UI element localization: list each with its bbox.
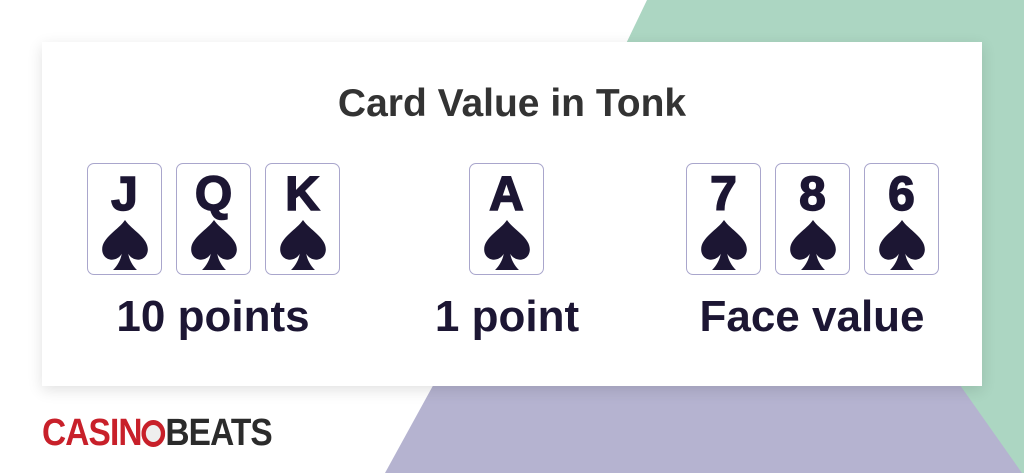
card K — [265, 163, 340, 275]
card 6 — [864, 163, 939, 275]
title: Card Value in Tonk — [338, 82, 686, 125]
card 8 — [775, 163, 850, 275]
label: 10 points: 10 points — [116, 292, 310, 341]
card A: A — [489, 168, 524, 221]
card 6: 6 — [888, 168, 915, 221]
card K: K — [285, 168, 320, 221]
card 7 — [686, 163, 761, 275]
card J: J — [111, 168, 138, 221]
label: 1 point: 1 point — [435, 292, 579, 341]
logo: CASIN BEATS — [42, 412, 272, 454]
panel: card values — [42, 42, 982, 386]
card 8: 8 — [799, 168, 826, 221]
card Q: Q — [195, 168, 232, 221]
card Q — [176, 163, 251, 275]
card 7: 7 — [710, 168, 737, 221]
card A — [469, 163, 544, 275]
card J — [87, 163, 162, 275]
label: face value: Face value — [699, 292, 925, 341]
